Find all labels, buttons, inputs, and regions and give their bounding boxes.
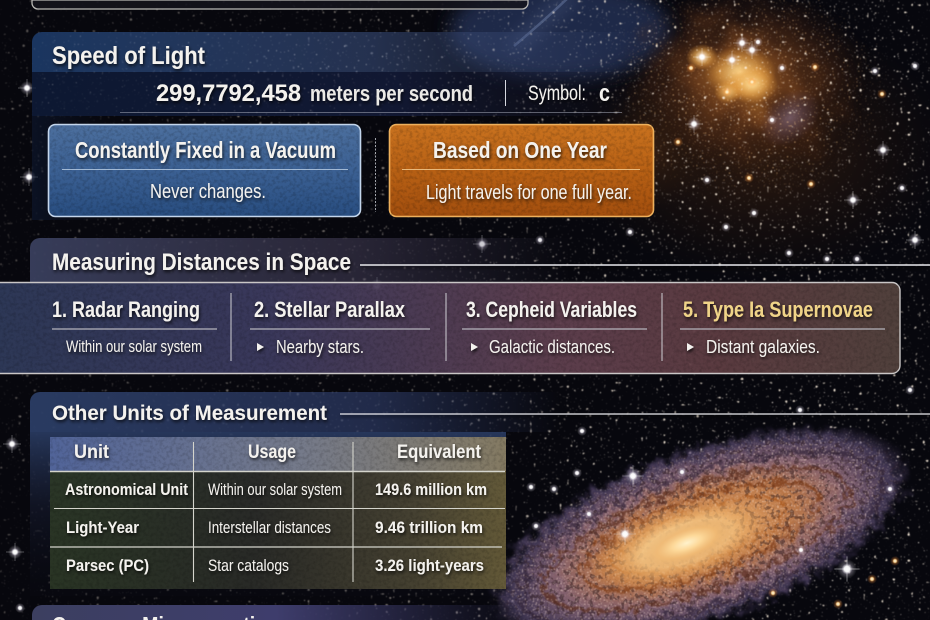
- panel: measuring distances in space: [0, 238, 930, 374]
- panel: previous section (cropped): [32, 0, 528, 9]
- method 3: cepheid variables: [462, 297, 647, 357]
- card: based on one year: [390, 124, 654, 216]
- method 1: radar ranging: [52, 297, 217, 356]
- nebula: orange star cluster: [570, 0, 930, 280]
- card: constantly fixed in a vacuum: Never changes.: [150, 181, 266, 203]
- band: four methods: [0, 282, 900, 374]
- method 2: stellar parallax: 2. Stellar Parallax: [254, 297, 406, 322]
- heading: other units: Other Units of Measurement: [52, 402, 327, 425]
- table row: parsec: 3.26 light-years: [375, 556, 484, 575]
- table row: light-year: 9.46 trillion km: [375, 518, 483, 537]
- symbol: c: [599, 80, 610, 107]
- milky streak: [512, 0, 572, 48]
- method 5: type Ia supernovae: 5. Type Ia Supernovae: [683, 297, 873, 322]
- method 5: type Ia supernovae: Distant galaxies.: [706, 337, 820, 357]
- card: based on one year: Based on One Year: [433, 137, 607, 163]
- panel: other units of measurement: [30, 392, 930, 596]
- table row: parsec: Star catalogs: [208, 556, 289, 575]
- table header: Equivalent: [397, 442, 482, 463]
- speed value: 299,7792,458: [156, 80, 301, 107]
- symbol: Symbol:: [528, 82, 586, 105]
- table header: Unit: [74, 442, 110, 463]
- method 2: stellar parallax: [250, 297, 430, 357]
- heading: measuring distances: Measuring Distances in Space: [52, 249, 351, 276]
- table header: Usage: [248, 442, 296, 463]
- card: constantly fixed in a vacuum: [48, 124, 360, 216]
- method 1: radar ranging: 1. Radar Ranging: [52, 297, 200, 322]
- heading: speed of light: Speed of Light: [52, 42, 206, 70]
- card: constantly fixed in a vacuum: Constantly Fixed in a Vacuum: [75, 137, 336, 163]
- card: based on one year: Light travels for one full year.: [426, 182, 632, 204]
- table row: astronomical unit: Within our solar system: [208, 480, 342, 499]
- table row: parsec: [66, 556, 484, 575]
- panel: common misconceptions (cropped): [32, 605, 498, 620]
- table header: [74, 442, 482, 463]
- method 5: type Ia supernovae: [680, 297, 885, 357]
- panel: speed of light: [32, 32, 654, 220]
- method 1: radar ranging: Within our solar system: [66, 337, 202, 356]
- method 3: cepheid variables: 3. Cepheid Variables: [466, 297, 637, 322]
- method 2: stellar parallax: Nearby stars.: [276, 337, 364, 357]
- table row: light-year: Interstellar distances: [208, 518, 331, 537]
- table row: light-year: Light-Year: [66, 518, 139, 537]
- method 3: cepheid variables: Galactic distances.: [489, 337, 615, 357]
- table row: light-year: [66, 518, 483, 537]
- units table: [50, 437, 506, 589]
- galaxy: [489, 424, 914, 620]
- table row: astronomical unit: [65, 480, 487, 499]
- table row: parsec: Parsec (PC): [66, 556, 149, 575]
- table row: astronomical unit: Astronomical Unit: [65, 480, 188, 499]
- speed value: [156, 80, 473, 107]
- speed value: meters per second: [310, 81, 473, 106]
- table row: astronomical unit: 149.6 million km: [375, 480, 487, 499]
